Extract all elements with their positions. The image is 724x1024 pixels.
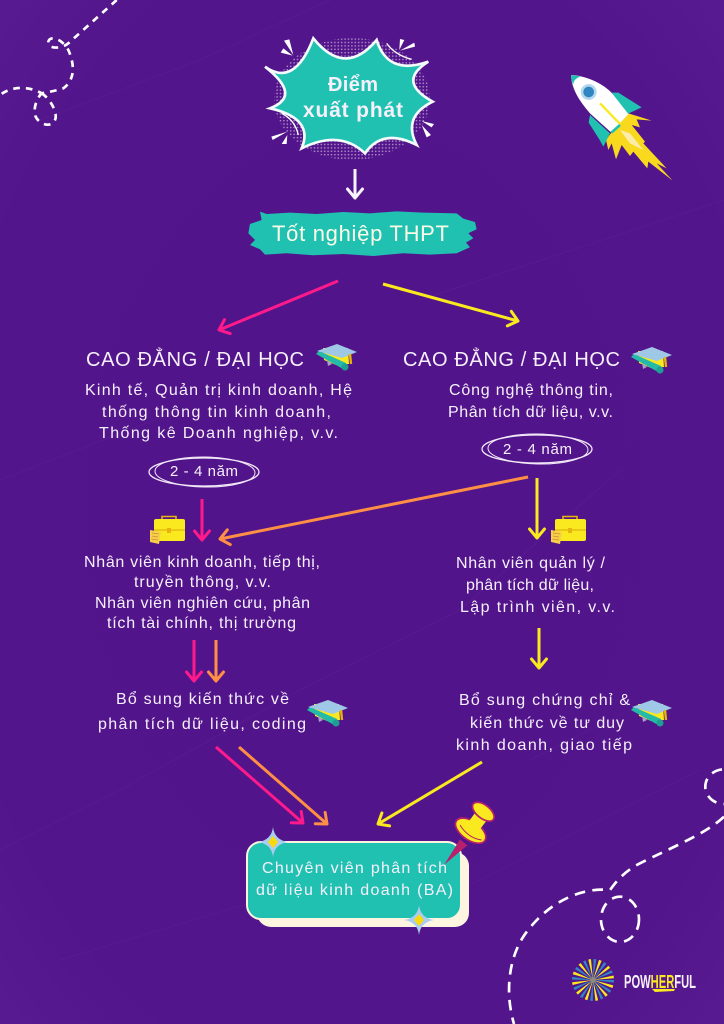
badge: left duration: 2 - 4 năm	[170, 463, 238, 480]
icon: graduation cap skills right	[631, 700, 672, 726]
heading: left track: CAO ĐẲNG / ĐẠI HỌC	[86, 348, 304, 371]
heading: left track	[86, 344, 357, 371]
icon: sparkle top	[258, 827, 288, 857]
text: right jobs	[456, 555, 615, 616]
arrow: left degree to job	[200, 499, 204, 540]
icon: graduation cap right	[631, 347, 672, 374]
text: left skills	[98, 690, 348, 733]
text: left jobs	[84, 554, 320, 632]
panel: final role BA: Chuyên viên phân tích	[262, 860, 447, 877]
starburst: Điểm xuất phát	[265, 38, 434, 160]
icon: pushpin	[444, 799, 497, 865]
arrow: THPT to left track	[219, 281, 338, 330]
decoration: bottom-right dashed path	[509, 769, 724, 1024]
text: right skills: Bổ sung chứng chỉ &	[459, 691, 630, 709]
logo sunburst	[582, 969, 604, 991]
logo wordmark: POWHERFUL	[624, 972, 696, 992]
text: right majors	[448, 382, 613, 421]
halftone dots	[274, 38, 430, 160]
text: left skills: phân tích dữ liệu, coding	[98, 716, 306, 733]
heading: right track	[403, 347, 672, 374]
arrow: right job to skills	[538, 628, 540, 668]
text: right majors: Phân tích dữ liệu, v.v.	[448, 404, 613, 421]
arrow: THPT to right track	[383, 284, 518, 321]
burst accent curves	[282, 43, 412, 135]
brush banner: Tốt nghiệp THPT: Tốt nghiệp THPT	[272, 221, 449, 246]
badge: right duration: 2 - 4 năm	[503, 441, 572, 458]
burst accent ticks	[271, 39, 434, 144]
arrow: left skills to BA orange	[239, 747, 327, 824]
text: left majors: Kinh tế, Quản trị kinh doanh, Hệ	[85, 382, 352, 399]
brush banner: Tốt nghiệp THPT	[248, 211, 477, 256]
text: right skills: kiến thức về tư duy	[470, 715, 624, 732]
panel: final role BA: dữ liệu kinh doanh (BA)	[256, 882, 453, 899]
text: left jobs: tích tài chính, thị trường	[107, 615, 296, 632]
icon: graduation cap skills left	[307, 700, 348, 726]
icon: briefcase right	[551, 516, 586, 544]
arrow: left job to skills pink	[192, 640, 196, 681]
text: right jobs: Lập trình viên, v.v.	[460, 599, 615, 616]
badge: right duration	[482, 433, 592, 465]
text: right jobs: phân tích dữ liệu,	[466, 577, 594, 594]
arrow: right degree to left job	[220, 477, 528, 539]
text: right skills: kinh doanh, giao tiếp	[456, 737, 632, 754]
arrow: left skills to BA pink	[216, 747, 303, 823]
arrow: right skills to BA	[378, 762, 482, 824]
starburst: Điểm xuất phát: xuất phát	[303, 99, 403, 122]
text: right majors: Công nghệ thông tin,	[449, 382, 613, 399]
text: left jobs: Nhân viên nghiên cứu, phân	[95, 595, 310, 612]
icon: graduation cap left	[316, 344, 357, 370]
text: left majors	[85, 382, 352, 442]
heading: right track: CAO ĐẲNG / ĐẠI HỌC	[403, 348, 620, 371]
text: left jobs: truyền thông, v.v.	[134, 574, 271, 591]
icon: briefcase left	[150, 516, 185, 544]
arrow: start to THPT	[354, 169, 356, 198]
text: left majors: thống thông tin kinh doanh,	[102, 404, 331, 421]
arrow: left job to skills orange	[214, 640, 218, 681]
text: left jobs: Nhân viên kinh doanh, tiếp thị,	[84, 554, 320, 571]
text: right skills	[456, 691, 672, 754]
icon: rocket	[571, 75, 673, 181]
logo: Powherful	[582, 969, 696, 992]
panel: final role BA	[247, 842, 469, 927]
burst shape	[265, 38, 433, 153]
text: left majors: Thống kê Doanh nghiệp, v.v.	[99, 425, 338, 442]
badge: left duration	[149, 456, 259, 488]
decoration: top-left dashed path	[0, 0, 117, 125]
burst title: Điểm	[328, 74, 378, 96]
arrow: right degree to right job	[536, 478, 538, 538]
text: left skills: Bổ sung kiến thức về	[116, 690, 289, 708]
text: right jobs: Nhân viên quản lý /	[456, 555, 606, 572]
icon: sparkle bottom	[404, 905, 434, 935]
